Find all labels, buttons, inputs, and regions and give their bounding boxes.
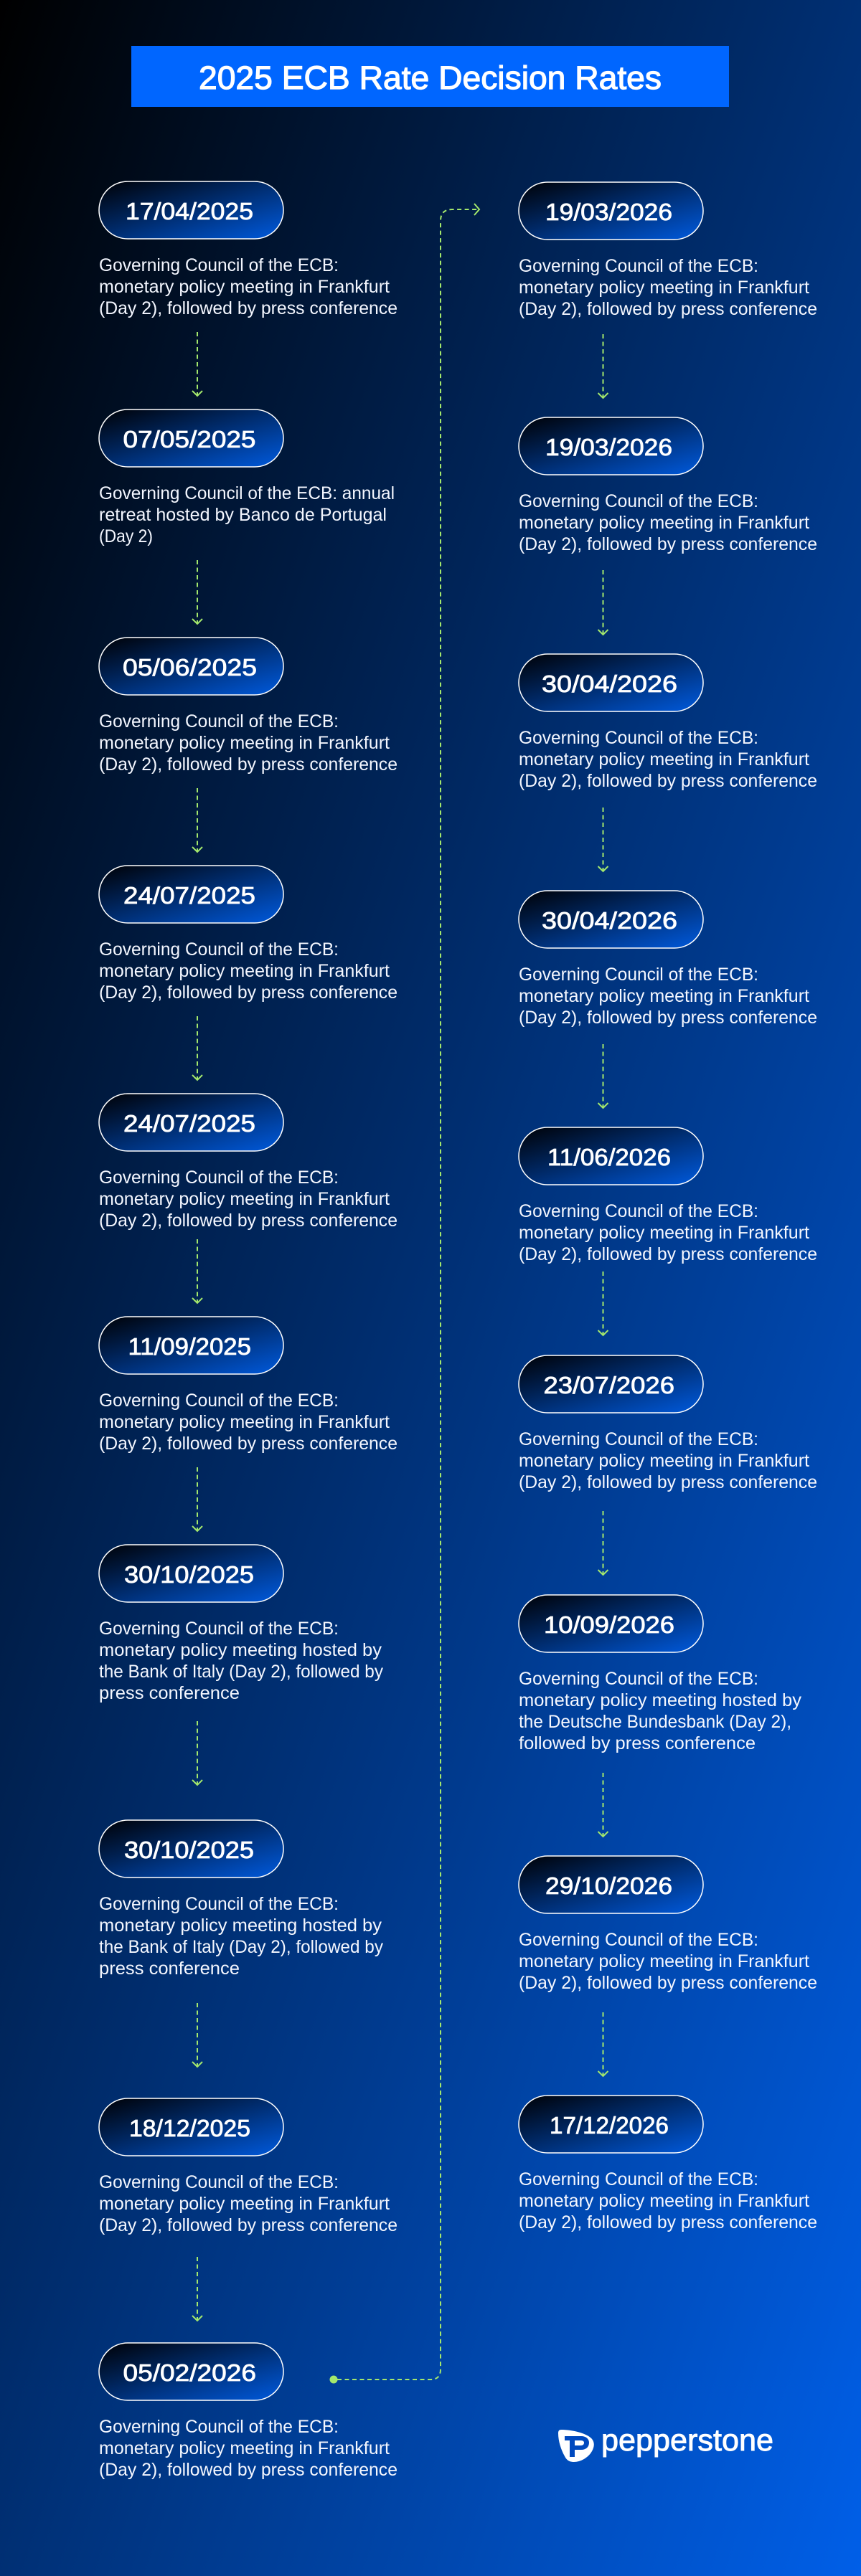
timeline entry: 10/09/2026 xyxy=(519,1595,801,1753)
timeline entry: 07/05/2025: 07/05/2025 xyxy=(123,426,255,453)
arrow xyxy=(598,808,608,871)
timeline entry: 17/04/2025: Governing Council of the ECB: xyxy=(99,255,339,275)
logo: pepperstone: pepperstone xyxy=(601,2423,773,2458)
timeline entry: 05/06/2025: monetary policy meeting in Frankfurt xyxy=(99,733,390,753)
arrow xyxy=(598,1773,608,1837)
timeline entry: 30/10/2025 (second): monetary policy meeting hosted by xyxy=(99,1916,382,1936)
timeline entry: 05/02/2026: monetary policy meeting in Frankfurt xyxy=(99,2438,390,2458)
timeline entry: 17/12/2026: 17/12/2026 xyxy=(550,2112,669,2139)
timeline entry: 10/09/2026: monetary policy meeting hosted by xyxy=(519,1690,801,1710)
timeline entry: 30/04/2026 (second): Governing Council of the ECB: xyxy=(519,965,758,985)
arrow xyxy=(598,334,608,398)
timeline entry: 18/12/2025 xyxy=(99,2098,397,2235)
timeline entry: 17/12/2026: Governing Council of the ECB: xyxy=(519,2169,758,2189)
timeline entry: 30/04/2026 (second): 30/04/2026 xyxy=(542,907,677,934)
timeline entry: 17/12/2026: monetary policy meeting in Frankfurt xyxy=(519,2191,809,2211)
arrow xyxy=(598,570,608,635)
timeline entry: 19/03/2026: (Day 2), followed by press conference xyxy=(519,299,817,319)
timeline entry: 17/04/2025: 17/04/2025 xyxy=(126,198,253,224)
arrow xyxy=(192,1467,202,1531)
timeline entry: 05/06/2025: Governing Council of the ECB: xyxy=(99,711,339,731)
timeline entry: 17/12/2026 xyxy=(519,2096,817,2232)
timeline entry: 19/03/2026 (second): monetary policy meeting in Frankfurt xyxy=(519,513,809,533)
timeline entry: 11/09/2025: Governing Council of the ECB: xyxy=(99,1391,339,1411)
timeline entry: 23/07/2026: monetary policy meeting in Frankfurt xyxy=(519,1451,809,1471)
timeline entry: 05/06/2025: (Day 2), followed by press conference xyxy=(99,754,397,775)
arrow xyxy=(192,1016,202,1080)
timeline entry: 11/09/2025: 11/09/2025 xyxy=(128,1333,251,1360)
timeline entry: 30/04/2026: (Day 2), followed by press conference xyxy=(519,771,817,791)
timeline entry: 30/04/2026: Governing Council of the ECB: xyxy=(519,728,758,748)
timeline entry: 05/02/2026 xyxy=(99,2343,397,2480)
timeline entry: 17/04/2025 xyxy=(99,181,397,318)
timeline entry: 23/07/2026 xyxy=(519,1355,817,1492)
timeline entry: 24/07/2025: monetary policy meeting in Frankfurt xyxy=(99,961,390,981)
timeline entry: 24/07/2025 (second): monetary policy meeting in Frankfurt xyxy=(99,1189,390,1209)
arrow xyxy=(192,2257,202,2321)
timeline entry: 24/07/2025: 24/07/2025 xyxy=(123,882,255,909)
timeline entry: 24/07/2025 (second): Governing Council of the ECB: xyxy=(99,1168,339,1188)
timeline entry: 17/12/2026: (Day 2), followed by press conference xyxy=(519,2212,817,2232)
arrow xyxy=(192,1721,202,1785)
timeline entry: 11/06/2026 xyxy=(519,1127,817,1264)
timeline entry: 19/03/2026 (second): (Day 2), followed by press conference xyxy=(519,534,817,554)
timeline entry: 29/10/2026: 29/10/2026 xyxy=(545,1872,672,1899)
timeline entry: 10/09/2026: followed by press conference xyxy=(519,1733,756,1753)
timeline entry: 24/07/2025 (second): (Day 2), followed by press conference xyxy=(99,1211,397,1231)
timeline entry: 30/10/2025 (second): 30/10/2025 xyxy=(124,1837,254,1863)
timeline entry: 30/10/2025: monetary policy meeting hosted by xyxy=(99,1640,382,1660)
timeline entry: 18/12/2025: monetary policy meeting in Frankfurt xyxy=(99,2194,390,2214)
timeline entry: 30/10/2025 (second) xyxy=(99,1820,383,1979)
arrow xyxy=(192,788,202,852)
timeline entry: 11/06/2026: monetary policy meeting in Frankfurt xyxy=(519,1223,809,1243)
timeline entry: 24/07/2025: (Day 2), followed by press conference xyxy=(99,982,397,1003)
timeline entry: 07/05/2025: retreat hosted by Banco de Portugal xyxy=(99,505,387,525)
timeline entry: 11/09/2025: monetary policy meeting in Frankfurt xyxy=(99,1412,390,1432)
timeline entry: 30/10/2025 xyxy=(99,1545,383,1703)
timeline entry: 10/09/2026: 10/09/2026 xyxy=(544,1611,674,1638)
timeline entry: 30/10/2025: 30/10/2025 xyxy=(124,1561,254,1588)
timeline entry: 24/07/2025 (second): 24/07/2025 xyxy=(123,1110,255,1137)
timeline entry: 30/04/2026 (second): (Day 2), followed by press conference xyxy=(519,1008,817,1028)
timeline entry: 24/07/2025 xyxy=(99,866,397,1003)
timeline entry: 23/07/2026: Governing Council of the ECB: xyxy=(519,1429,758,1449)
timeline entry: 07/05/2025 xyxy=(99,409,395,546)
timeline entry: 18/12/2025: Governing Council of the ECB: xyxy=(99,2172,339,2192)
timeline entry: 29/10/2026: monetary policy meeting in Frankfurt xyxy=(519,1951,809,1971)
timeline entry: 10/09/2026: the Deutsche Bundesbank (Day 2), xyxy=(519,1712,791,1732)
timeline entry: 30/10/2025 (second): Governing Council of the ECB: xyxy=(99,1894,339,1914)
timeline entry: 11/09/2025 xyxy=(99,1317,397,1454)
timeline entry: 30/10/2025: Governing Council of the ECB: xyxy=(99,1619,339,1639)
timeline entry: 19/03/2026: 19/03/2026 xyxy=(545,199,672,225)
timeline entry: 30/04/2026 (second) xyxy=(519,891,817,1028)
timeline entry: 30/10/2025 (second): the Bank of Italy (Day 2), followed by xyxy=(99,1937,383,1957)
arrow xyxy=(192,2003,202,2067)
timeline entry: 05/02/2026: Governing Council of the ECB: xyxy=(99,2417,339,2437)
timeline entry: 18/12/2025: 18/12/2025 xyxy=(129,2115,250,2141)
timeline entry: 05/06/2025 xyxy=(99,638,397,775)
timeline entry: 30/10/2025: the Bank of Italy (Day 2), followed by xyxy=(99,1662,383,1682)
timeline entry: 11/09/2025: (Day 2), followed by press conference xyxy=(99,1434,397,1454)
title: 2025 ECB Rate Decision Rates xyxy=(199,60,662,96)
timeline entry: 29/10/2026 xyxy=(519,1856,817,1993)
timeline entry: 11/06/2026: Governing Council of the ECB: xyxy=(519,1201,758,1221)
timeline entry: 29/10/2026: Governing Council of the ECB: xyxy=(519,1930,758,1950)
timeline entry: 30/10/2025 (second): press conference xyxy=(99,1959,240,1979)
title xyxy=(131,46,729,107)
timeline entry: 30/04/2026 (second): monetary policy meeting in Frankfurt xyxy=(519,986,809,1006)
arrow xyxy=(598,1272,608,1335)
timeline entry: 05/02/2026: 05/02/2026 xyxy=(123,2359,256,2386)
timeline entry: 19/03/2026 xyxy=(519,182,817,319)
timeline entry: 18/12/2025: (Day 2), followed by press conference xyxy=(99,2215,397,2235)
timeline entry: 07/05/2025: (Day 2) xyxy=(99,526,153,546)
timeline entry: 07/05/2025: Governing Council of the ECB: annual xyxy=(99,483,395,503)
timeline entry: 19/03/2026: monetary policy meeting in Frankfurt xyxy=(519,278,809,298)
connector arrow between columns xyxy=(330,204,479,2384)
timeline entry: 11/06/2026: 11/06/2026 xyxy=(547,1144,671,1170)
timeline entry: 10/09/2026: Governing Council of the ECB: xyxy=(519,1669,758,1689)
timeline entry: 30/04/2026: 30/04/2026 xyxy=(542,671,677,697)
arrow xyxy=(192,332,202,396)
arrow xyxy=(598,1511,608,1575)
arrow xyxy=(192,560,202,624)
timeline entry: 17/04/2025: monetary policy meeting in Frankfurt xyxy=(99,277,390,297)
timeline entry: 11/06/2026: (Day 2), followed by press conference xyxy=(519,1244,817,1264)
timeline entry: 05/06/2025: 05/06/2025 xyxy=(123,654,257,681)
arrow xyxy=(598,1044,608,1108)
timeline entry: 24/07/2025: Governing Council of the ECB: xyxy=(99,939,339,960)
timeline entry: 19/03/2026 (second) xyxy=(519,417,817,554)
arrow xyxy=(598,2012,608,2076)
timeline entry: 30/10/2025: press conference xyxy=(99,1683,240,1703)
timeline entry: 23/07/2026: (Day 2), followed by press conference xyxy=(519,1472,817,1492)
arrow xyxy=(192,1239,202,1303)
timeline entry: 05/02/2026: (Day 2), followed by press conference xyxy=(99,2460,397,2480)
timeline entry: 17/04/2025: (Day 2), followed by press conference xyxy=(99,298,397,318)
timeline entry: 30/04/2026 xyxy=(519,654,817,791)
timeline entry: 19/03/2026 (second): 19/03/2026 xyxy=(545,434,672,460)
timeline entry: 29/10/2026: (Day 2), followed by press conference xyxy=(519,1973,817,1993)
timeline entry: 19/03/2026: Governing Council of the ECB: xyxy=(519,256,758,276)
timeline entry: 23/07/2026: 23/07/2026 xyxy=(544,1372,674,1398)
timeline entry: 30/04/2026: monetary policy meeting in Frankfurt xyxy=(519,749,809,770)
timeline entry: 24/07/2025 (second) xyxy=(99,1094,397,1231)
timeline entry: 19/03/2026 (second): Governing Council of the ECB: xyxy=(519,491,758,511)
